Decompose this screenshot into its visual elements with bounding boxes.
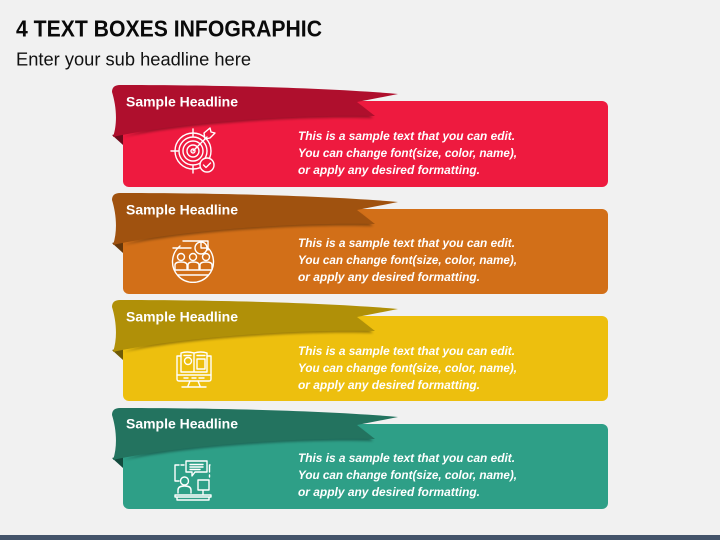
icon: monitor with book: [177, 352, 211, 387]
ribbon: [112, 408, 398, 460]
panel: green: [112, 408, 608, 509]
body text: or apply any desired formatting.: [298, 485, 480, 499]
headline: Sample Headline: [126, 308, 238, 324]
body text: or apply any desired formatting.: [298, 378, 480, 392]
body text: [298, 451, 517, 499]
body text: You can change font(size, color, name),: [298, 253, 517, 267]
body text: This is a sample text that you can edit.: [298, 129, 515, 143]
title: 4 TEXT BOXES INFOGRAPHIC: [16, 16, 322, 42]
ribbon shadow: [123, 106, 373, 137]
body text: This is a sample text that you can edit.: [298, 451, 515, 465]
ribbon: [112, 85, 398, 137]
body text: You can change font(size, color, name),: [298, 361, 517, 375]
text box: [123, 101, 608, 187]
body text: or apply any desired formatting.: [298, 270, 480, 284]
ribbon fold: [112, 240, 123, 253]
subtitle: Enter your sub headline here: [16, 50, 251, 70]
panel: orange: [112, 193, 608, 294]
body text: You can change font(size, color, name),: [298, 146, 517, 160]
ribbon shadow: [123, 429, 373, 460]
text box: [123, 209, 608, 294]
headline: Sample Headline: [126, 94, 238, 110]
body text: [298, 236, 517, 284]
text box: [123, 316, 608, 401]
panel: yellow: [112, 300, 608, 401]
icon: target: [171, 128, 215, 173]
ribbon fold: [112, 455, 123, 468]
ribbon: [112, 193, 398, 245]
footer bar: [0, 535, 720, 540]
body text: [298, 344, 517, 392]
icon: meeting: [172, 241, 214, 282]
ribbon: [112, 300, 398, 352]
body text: [298, 129, 517, 177]
ribbon shadow: [123, 214, 373, 245]
ribbon fold: [112, 347, 123, 360]
headline: Sample Headline: [126, 416, 238, 432]
body text: You can change font(size, color, name),: [298, 468, 517, 482]
ribbon shadow: [123, 321, 373, 352]
body text: This is a sample text that you can edit.: [298, 236, 515, 250]
headline: Sample Headline: [126, 202, 238, 218]
text box: [123, 424, 608, 509]
ribbon fold: [112, 132, 123, 145]
body text: This is a sample text that you can edit.: [298, 344, 515, 358]
icon: person with chat: [175, 461, 211, 500]
panel: red: [112, 85, 608, 187]
body text: or apply any desired formatting.: [298, 163, 480, 177]
